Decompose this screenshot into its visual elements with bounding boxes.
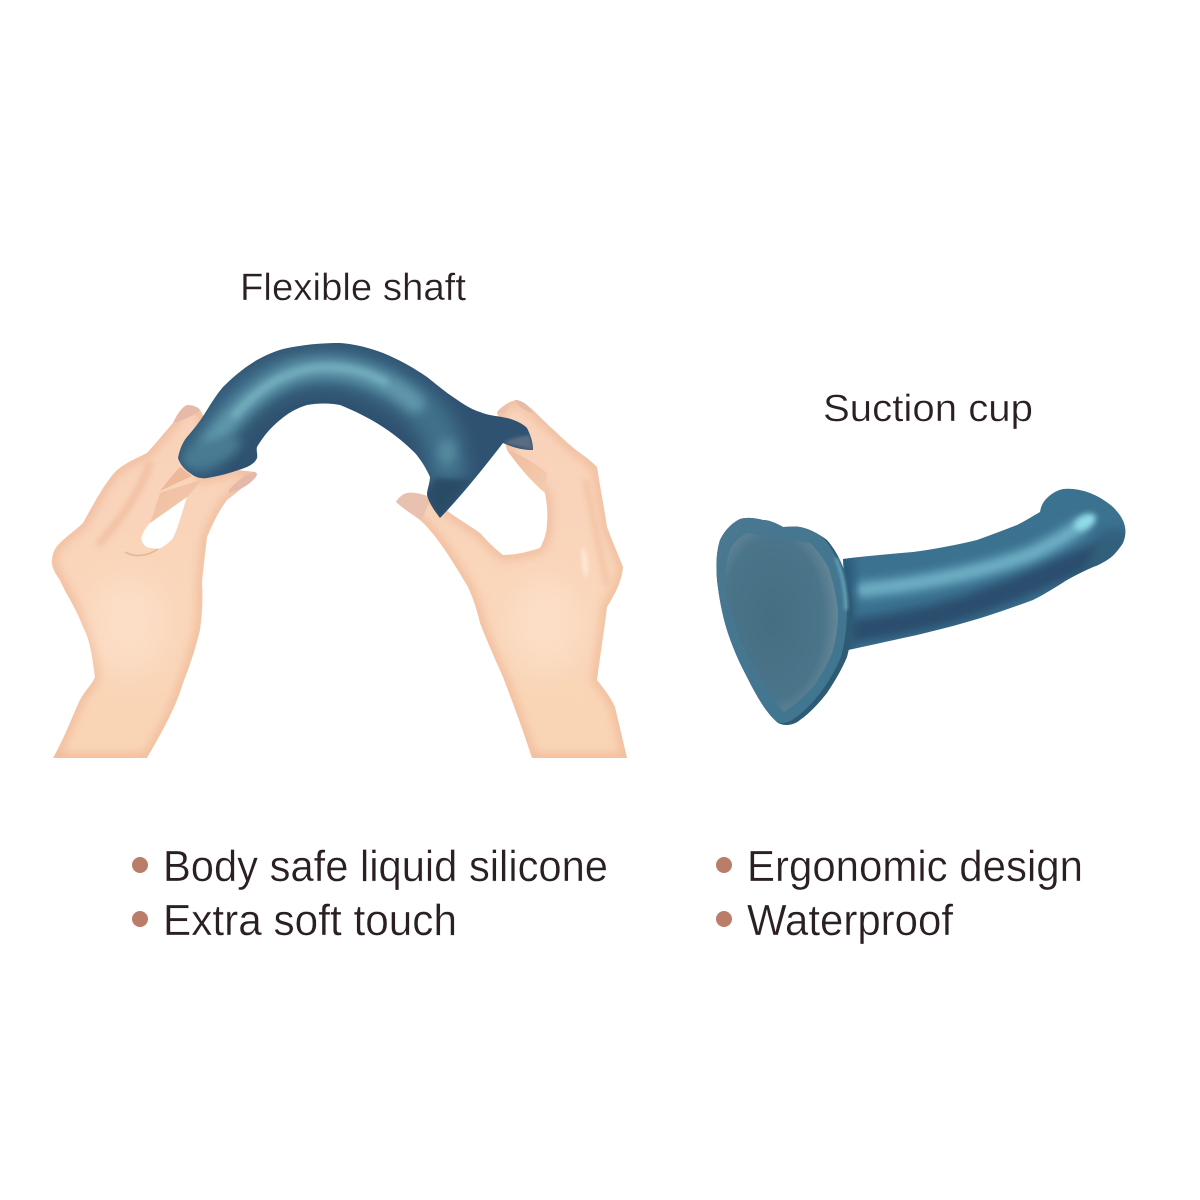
lower dark band xyxy=(848,550,1112,632)
thumb nail xyxy=(396,493,430,520)
bullet xyxy=(132,857,148,873)
finger behind xyxy=(507,450,547,493)
fingertip nails xyxy=(515,400,533,413)
right hand shading xyxy=(396,400,627,758)
product: suction cup view xyxy=(716,480,1130,725)
index finger nail xyxy=(173,405,200,423)
shaft sheen xyxy=(200,368,448,470)
shaft xyxy=(843,488,1126,650)
cup front rim xyxy=(716,518,847,723)
heading: Suction cup: Suction cup xyxy=(823,388,1033,430)
tip lower sheen xyxy=(182,436,243,468)
left hand xyxy=(52,405,257,758)
right hand xyxy=(396,400,627,758)
feature list: left column xyxy=(132,842,608,945)
feature: Extra soft touch: Extra soft touch xyxy=(163,896,457,945)
feature list: right column xyxy=(716,842,1083,945)
tip lower shade xyxy=(1087,526,1126,570)
palm crease xyxy=(125,549,158,556)
base sheen xyxy=(438,439,456,465)
hole between thumb and fingers xyxy=(141,497,187,549)
cup back lip xyxy=(716,518,853,725)
thumb nail xyxy=(229,472,257,493)
flap underside xyxy=(503,435,533,450)
bullet xyxy=(716,857,732,873)
rim edge highlight xyxy=(836,558,846,610)
feature: Waterproof: Waterproof xyxy=(747,896,954,945)
knuckle highlight xyxy=(581,547,588,578)
flap lower shade xyxy=(428,478,470,518)
feature: Ergonomic design: Ergonomic design xyxy=(747,842,1083,891)
heading: Flexible shaft: Flexible shaft xyxy=(240,267,466,309)
photo: hands flexing the product xyxy=(52,335,627,758)
tip glow xyxy=(1071,510,1099,534)
cup inner surface xyxy=(725,533,838,712)
bullet xyxy=(132,911,148,927)
feature: Body safe liquid silicone: Body safe liquid silicone xyxy=(163,842,608,891)
base shadow xyxy=(838,555,854,655)
flexed product xyxy=(178,343,533,518)
shaft highlight xyxy=(862,526,1080,590)
left hand shading xyxy=(52,405,255,758)
bullet xyxy=(716,911,732,927)
fingers behind xyxy=(150,479,203,523)
